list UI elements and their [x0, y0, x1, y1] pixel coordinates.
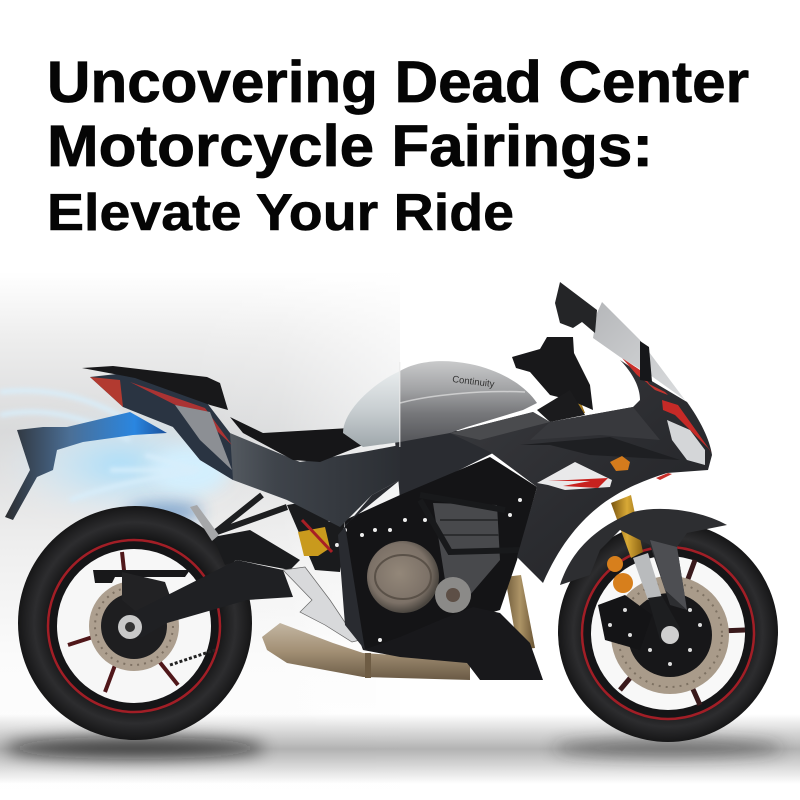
subframe strut	[212, 495, 287, 535]
engine	[345, 457, 537, 650]
rear footpeg	[190, 505, 219, 541]
front fork	[611, 495, 680, 645]
rear wheel	[18, 506, 252, 740]
main fairing	[450, 358, 712, 583]
mirror	[555, 282, 597, 333]
windscreen	[593, 302, 685, 400]
rider seat	[230, 417, 363, 462]
handlebar	[512, 337, 593, 422]
front wheel	[558, 522, 778, 742]
tail unit	[90, 372, 233, 480]
ground shadow	[0, 714, 800, 784]
front fender	[560, 509, 727, 610]
orange reflectors	[607, 556, 633, 593]
motorcycle	[5, 282, 778, 742]
hugger	[213, 530, 300, 570]
center split line	[399, 362, 400, 447]
rear subframe panel	[173, 410, 400, 527]
fork leg highlight	[650, 540, 687, 610]
frame side plate	[338, 480, 400, 650]
gold rear shock	[298, 520, 332, 556]
exhaust	[262, 575, 535, 680]
upper fork	[563, 393, 585, 417]
swingarm	[118, 560, 293, 638]
panel under tank	[395, 430, 495, 500]
fuel tank: Continuity	[452, 374, 495, 390]
title: Elevate Your Ride	[47, 184, 514, 242]
title	[47, 50, 749, 242]
blue exhaust glow	[0, 391, 240, 523]
speckled fasteners	[323, 508, 347, 547]
rear hub	[118, 615, 142, 639]
title: Uncovering Dead Center	[47, 50, 749, 115]
title: Motorcycle Fairings:	[47, 114, 653, 179]
belly pan	[363, 607, 543, 680]
suspension frame	[287, 497, 345, 572]
mirror stem	[640, 341, 652, 382]
pillion seat	[82, 366, 228, 410]
fuel tank	[343, 361, 537, 447]
license plate arm	[5, 412, 167, 520]
footpeg bracket	[283, 567, 360, 642]
